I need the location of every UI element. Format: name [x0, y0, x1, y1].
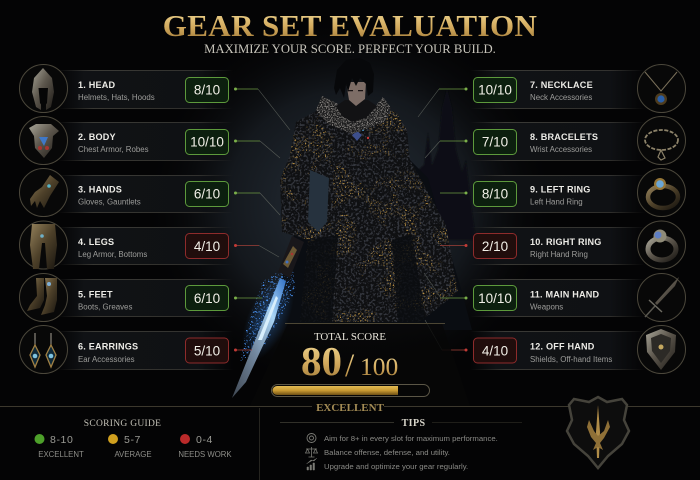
panel: necklace: 7. NECKLACE	[530, 80, 593, 90]
character figure	[231, 58, 472, 398]
score badge: 4/10	[482, 344, 508, 358]
icon: target	[307, 434, 316, 442]
icon: chest armor	[20, 116, 68, 164]
icon: gauntlet	[20, 168, 68, 216]
score badge: 6/10	[194, 186, 220, 202]
scoring guide heading: SCORING GUIDE	[84, 419, 161, 429]
score badge	[474, 78, 516, 102]
legend: average: AVERAGE	[114, 450, 152, 459]
score badge	[186, 286, 228, 310]
panel: left ring: Left Hand Ring	[530, 198, 583, 206]
score badge: 8/10	[194, 82, 220, 98]
icon: scales	[306, 447, 318, 457]
panel: legs	[20, 221, 233, 269]
subtitle: MAXIMIZE YOUR SCORE. PERFECT YOUR BUILD.	[204, 42, 496, 56]
score value	[301, 338, 398, 384]
score badge: 5/10	[194, 344, 220, 358]
panel: right ring: Right Hand Ring	[530, 250, 588, 259]
icon: ring	[638, 168, 686, 216]
panel: main hand: Weapons	[530, 302, 563, 312]
score value: 80	[301, 338, 342, 384]
panel: off hand	[470, 326, 686, 374]
panel: feet	[20, 274, 233, 322]
legend: needs work	[178, 434, 232, 459]
legend: excellent: 8-10	[50, 434, 73, 446]
panel: main hand	[470, 274, 686, 322]
panel: tips	[280, 418, 522, 471]
score badge: 7/10	[482, 134, 508, 150]
panel: body	[20, 116, 233, 164]
panel: legs: Leg Armor, Bottoms	[78, 250, 147, 259]
panel: necklace: Neck Accessories	[530, 93, 592, 102]
cape	[250, 150, 472, 330]
score badge	[474, 286, 516, 310]
legend: average: 5-7	[124, 434, 141, 446]
legend: excellent: EXCELLENT	[38, 450, 84, 459]
panel: body: Chest Armor, Robes	[78, 145, 149, 154]
panel: bracelets: 8. BRACELETS	[530, 132, 598, 142]
score badge	[186, 78, 228, 102]
icon: sword	[638, 274, 686, 322]
face	[346, 82, 366, 106]
total score heading: TOTAL SCORE	[314, 331, 386, 343]
sword	[231, 236, 305, 398]
score badge: 10/10	[478, 291, 512, 306]
panel: bracelets	[470, 116, 686, 164]
castle silhouette	[412, 88, 476, 240]
panel: earrings: Ear Accessories	[78, 355, 135, 364]
icon: leg armor	[20, 221, 68, 269]
score badge	[474, 234, 516, 258]
tips heading: TIPS	[402, 418, 425, 429]
icon: earrings	[20, 326, 68, 374]
panel: head: 1. HEAD	[78, 80, 116, 90]
fur collar	[316, 96, 391, 134]
rating label: EXCELLENT	[316, 402, 385, 414]
panel: total score	[250, 323, 470, 414]
panel: hands: Gloves, Gauntlets	[78, 198, 141, 206]
score badge: 4/10	[194, 239, 220, 254]
score badge: 2/10	[482, 239, 508, 254]
title: GEAR SET EVALUATION	[163, 8, 537, 43]
panel: left ring: 9. LEFT RING	[530, 184, 591, 194]
panel: body: 2. BODY	[78, 132, 116, 142]
icon: boots	[20, 274, 68, 322]
legend: excellent	[34, 434, 84, 459]
legend: needs work: 0-4	[196, 434, 213, 446]
panel: main hand: 11. MAIN HAND	[530, 290, 600, 300]
panel: hands	[20, 168, 233, 216]
panel: left ring	[470, 168, 686, 216]
panel: necklace	[470, 64, 686, 112]
score badge: 6/10	[194, 291, 220, 306]
connector lines right	[418, 88, 468, 352]
score badge: 10/10	[478, 82, 512, 98]
panel: off hand: 12. OFF HAND	[530, 342, 595, 352]
tip 2: Balance offense, defense, and utility.	[324, 448, 450, 457]
panel: right ring: 10. RIGHT RING	[530, 237, 602, 247]
score badge	[474, 338, 516, 363]
emblem	[567, 397, 629, 468]
icon: silver ring	[638, 221, 686, 269]
gap showing haze between arm and torso	[308, 170, 329, 232]
armor filigree	[280, 110, 458, 322]
icon: bracelet	[638, 116, 686, 164]
icon: helmet	[20, 64, 68, 112]
score badge	[186, 182, 228, 206]
tip 1: Aim for 8+ in every slot for maximum performance.	[324, 434, 498, 443]
score value: 100	[360, 352, 398, 381]
panel: bracelets: Wrist Accessories	[530, 145, 592, 154]
tip 3: Upgrade and optimize your gear regularly.	[324, 462, 468, 471]
icon: shield	[638, 326, 686, 374]
icon: necklace	[638, 64, 686, 112]
panel: feet: Boots, Greaves	[78, 302, 132, 312]
panel: right ring	[470, 221, 686, 269]
panel: head	[20, 64, 233, 112]
score badge	[186, 338, 228, 363]
score badge	[474, 130, 516, 154]
score badge: 10/10	[190, 134, 224, 150]
legend: needs work: NEEDS WORK	[178, 450, 232, 459]
panel: scoring guide	[0, 406, 700, 480]
connector lines left	[234, 88, 290, 352]
panel: legs: 4. LEGS	[78, 237, 114, 247]
panel: off hand: Shields, Off-hand Items	[530, 355, 612, 364]
legend: average	[108, 434, 152, 459]
score badge: 8/10	[482, 186, 508, 202]
hair	[334, 58, 374, 98]
panel: earrings: 6. EARRINGS	[78, 342, 138, 352]
armored body	[280, 106, 458, 322]
progress bar	[272, 384, 430, 396]
score badge	[186, 234, 228, 258]
score badge	[474, 182, 516, 206]
panel: head: Helmets, Hats, Hoods	[78, 93, 155, 102]
panel: hands: 3. HANDS	[78, 184, 122, 194]
icon: growth chart	[306, 458, 317, 470]
score value: /	[345, 348, 355, 384]
chest gems	[352, 131, 362, 141]
score badge	[186, 130, 228, 154]
panel: feet: 5. FEET	[78, 290, 113, 300]
panel: earrings	[20, 326, 233, 374]
